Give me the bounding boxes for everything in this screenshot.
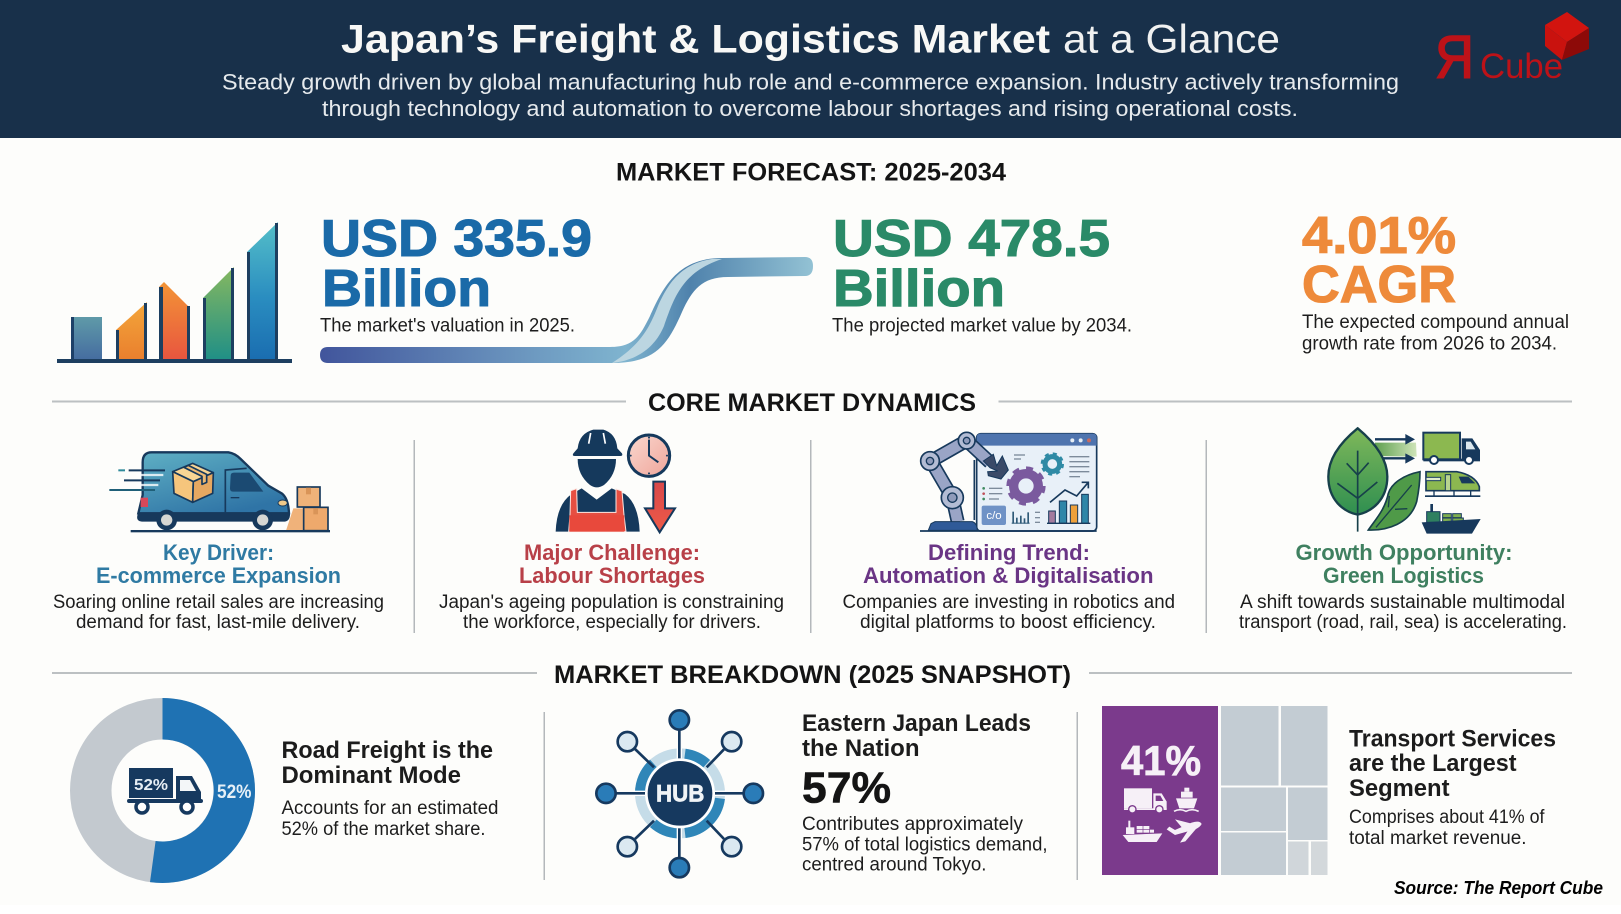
text: key driver [53,592,384,633]
text: defining trend: digital platforms to boost efficiency. [860,612,1156,633]
stat: CAGR: The expected compound annual [1302,312,1569,333]
heading: major challenge [519,540,705,588]
subtitle [222,70,1399,121]
text: major challenge: Japan's ageing population is constraining [439,592,784,613]
heading: eastern japan: Eastern Japan Leads [802,710,1031,737]
donut chart: 52% [217,782,252,803]
stat: 57%: 57% [802,764,891,812]
heading: major challenge: Labour Shortages [519,563,705,588]
icon: leaves and multimodal transport [1328,428,1481,534]
subtitle: Steady growth driven by global manufacturing hub role and e-commerce expansion. Industry actively transforming [222,70,1399,94]
logo: RCube [1435,12,1589,91]
text: eastern japan [802,814,1048,876]
heading: growth opportunity [1296,540,1512,588]
subtitle: through technology and automation to overcome labour shortages and rising operational costs. [322,96,1298,121]
header banner [0,0,1621,138]
text: road freight [282,798,498,840]
stat: 2034 projection: USD 478.5 [833,210,1110,268]
heading: road freight: Road Freight is the [282,737,493,764]
text: eastern japan: centred around Tokyo. [802,854,986,876]
stat: 2034 projection: The projected market value by 2034. [832,316,1132,336]
text: road freight: Accounts for an estimated [282,798,498,819]
stat: 2025 valuation [320,210,592,336]
growth ribbon arrow [320,257,813,363]
heading: market forecast: MARKET FORECAST: 2025-2034 [616,158,1006,186]
heading: transport services: Segment [1349,775,1450,802]
icon: hub network: HUB [656,780,704,807]
heading: eastern japan: the Nation [802,735,920,762]
text: key driver: Soaring online retail sales are increasing [53,592,384,613]
heading: core market dynamics: CORE MARKET DYNAMICS [648,389,976,417]
text: transport services: Comprises about 41% of [1349,807,1545,828]
heading: defining trend: Defining Trend: [928,540,1090,565]
text: eastern japan: 57% of total logistics demand, [802,834,1048,856]
heading: key driver [96,540,341,588]
icon: hub network [596,710,763,877]
panel: transport services [1102,706,1556,875]
title: Japan’s Freight & Logistics Market [341,18,1050,62]
heading: growth opportunity: Growth Opportunity: [1296,540,1512,565]
icons: transport modes [1123,788,1202,843]
stat: 2034 projection [832,210,1132,336]
title suffix: at a Glance [1063,18,1280,62]
heading: major challenge: Major Challenge: [524,540,700,565]
text: major challenge: the workforce, especially for drivers. [463,612,761,633]
text: eastern japan: Contributes approximately [802,814,1023,835]
source note: Source: The Report Cube [1394,878,1603,898]
icon: worker with clock and down arrow [556,430,675,532]
text: transport services: total market revenue. [1349,828,1526,849]
heading: transport services: Transport Services [1349,726,1556,752]
panel: eastern japan [596,710,1048,877]
logo: RCube: Я [1435,24,1474,91]
heading: transport services: are the Largest [1349,750,1516,777]
heading: transport services [1349,726,1556,802]
stat: CAGR: 4.01% [1302,207,1456,265]
panel: major challenge [439,430,784,633]
donut chart [91,698,255,883]
heading: defining trend: Automation & Digitalisation [863,563,1154,588]
stat: 2025 valuation: The market's valuation in 2025. [320,316,575,336]
heading: key driver: E-commerce Expansion [96,563,341,588]
stat: CAGR [1302,207,1569,354]
text: defining trend: Companies are investing in robotics and [842,592,1175,613]
heading: key driver: Key Driver: [163,540,274,565]
heading: defining trend [863,540,1154,588]
stat: 2034 projection: Billion [833,260,1005,318]
text: defining trend [842,592,1175,633]
text: key driver: demand for fast, last-mile delivery. [76,612,360,633]
heading: eastern japan [802,710,1031,762]
text: growth opportunity: transport (road, rail, sea) is accelerating. [1239,612,1567,633]
logo: RCube: Cube [1480,47,1563,86]
bar chart icon [57,222,292,363]
stat: CAGR: CAGR [1302,256,1456,314]
stat: 2025 valuation: USD 335.9 [321,210,592,268]
panel: defining trend [842,432,1175,633]
panel: key driver [53,452,384,633]
heading: road freight: Dominant Mode [282,762,461,789]
icon: robot arm and dashboard: c/o [986,510,1002,522]
icon: truck with 52% [127,768,203,813]
stat: CAGR: growth rate from 2026 to 2034. [1302,334,1557,354]
icon: robot arm and dashboard [920,432,1097,531]
label: 41%: 41% [1121,737,1201,784]
text: growth opportunity: A shift towards sustainable multimodal [1240,592,1565,613]
treemap [1102,706,1328,875]
stat: 2025 valuation: Billion [322,260,491,318]
icon: delivery van [109,452,330,532]
panel: road freight [91,698,498,883]
text: road freight: 52% of the market share. [282,819,486,840]
icon: truck with 52%: 52% [134,777,168,794]
heading: market breakdown: MARKET BREAKDOWN (2025 SNAPSHOT) [554,661,1071,689]
heading: growth opportunity: Green Logistics [1323,563,1484,588]
heading: road freight [282,737,493,789]
panel: growth opportunity [1239,428,1567,633]
text: transport services [1349,807,1545,849]
text: major challenge [439,592,784,633]
text: growth opportunity [1239,592,1567,633]
